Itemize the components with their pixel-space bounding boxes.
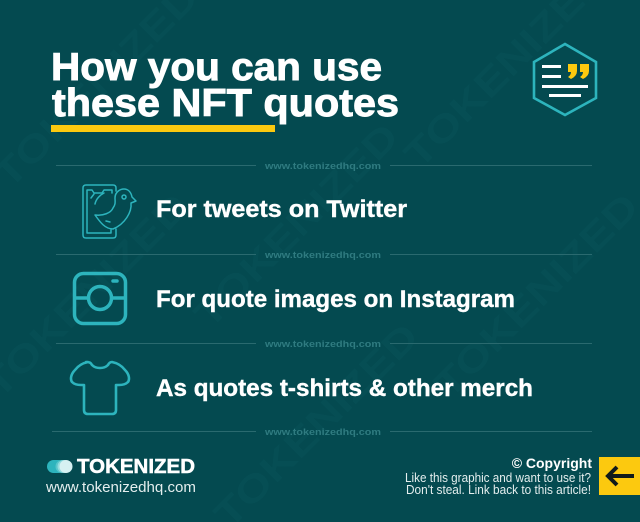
label: merch: As quotes t-shirts & other merch	[156, 375, 533, 402]
divider row 4 with url: www.tokenizedhq.com	[264, 427, 381, 438]
icon: logo mark	[47, 460, 72, 473]
divider row 2 with url: www.tokenizedhq.com	[264, 250, 381, 261]
icon: instagram camera	[74, 274, 126, 324]
icon: quote hexagon	[534, 44, 596, 115]
label: twitter: For tweets on Twitter	[156, 196, 407, 223]
label: instagram: For quote images on Instagram	[156, 286, 515, 313]
title: these NFT quotes	[52, 82, 399, 125]
icon: t-shirt	[71, 362, 129, 414]
text: TOKENIZED	[187, 116, 407, 336]
title underline	[51, 125, 275, 132]
logo: tokenized: TOKENIZED	[77, 456, 195, 478]
copyright notice: Don't steal. Link back to this article!	[406, 482, 591, 497]
website url: www.tokenizedhq.com	[45, 479, 196, 496]
back arrow button	[599, 457, 640, 495]
divider row 3 with url: www.tokenizedhq.com	[264, 339, 381, 350]
title: How you can use	[51, 46, 382, 89]
copyright notice	[405, 455, 592, 497]
icon: phone with bird	[83, 185, 136, 238]
text: TOKENIZED	[427, 186, 640, 406]
copyright notice: Like this graphic and want to use it?	[405, 470, 591, 485]
copyright notice: © Copyright	[512, 455, 592, 471]
title	[51, 46, 399, 125]
divider row 1 with url: www.tokenizedhq.com	[264, 161, 381, 172]
